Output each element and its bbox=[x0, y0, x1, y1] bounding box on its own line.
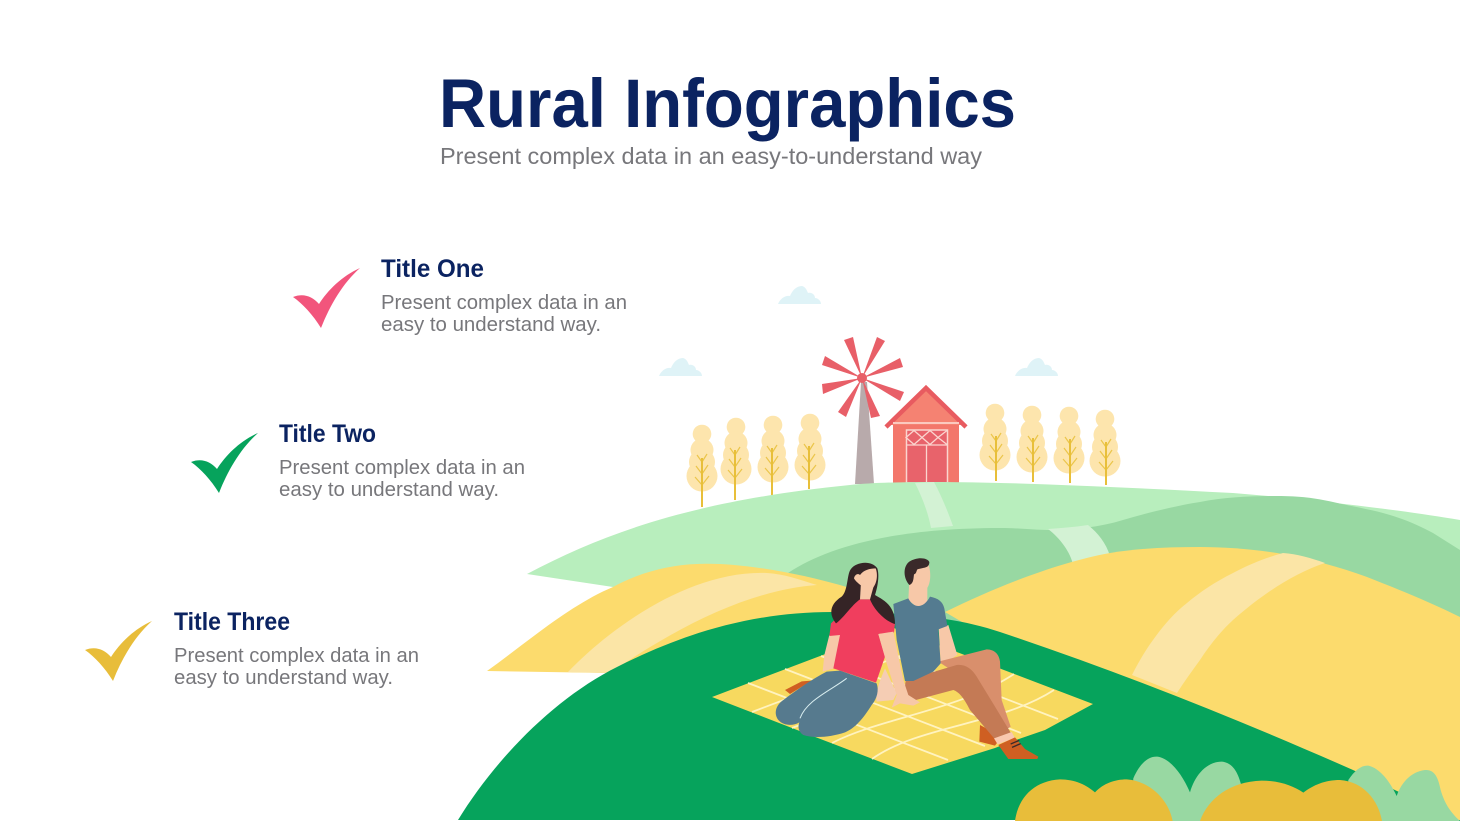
clouds bbox=[659, 286, 1058, 376]
hill: left yellow bbox=[487, 564, 860, 690]
woman hair bbox=[831, 563, 895, 624]
road on mid hill bbox=[1048, 525, 1110, 565]
hill: mid green bbox=[788, 496, 1460, 700]
man back leg bbox=[938, 649, 1011, 738]
woman inner hand bbox=[876, 668, 897, 702]
item one bbox=[293, 255, 627, 336]
icon: pink check mark bbox=[293, 268, 360, 328]
man arm bbox=[939, 625, 957, 663]
woman neck bbox=[860, 582, 874, 599]
yellow bush right bbox=[1200, 780, 1382, 821]
woman foot bbox=[785, 681, 812, 694]
woman trousers bbox=[776, 671, 878, 737]
text: description one: Present complex data in an bbox=[381, 292, 627, 314]
yellow bush left bbox=[1015, 779, 1173, 821]
icon: yellow check mark bbox=[85, 621, 152, 681]
woman shirt bbox=[829, 598, 895, 683]
heading: title two: Title Two bbox=[279, 420, 376, 448]
road on back hill bbox=[915, 482, 953, 528]
trouser seam bbox=[800, 678, 847, 718]
text: description three: easy to understand way. bbox=[174, 667, 393, 689]
people bbox=[776, 558, 1038, 759]
windmill bbox=[822, 337, 904, 484]
woman rear arm bbox=[823, 633, 841, 672]
stripe on right hill bbox=[1132, 553, 1325, 693]
man back shoe bbox=[979, 725, 1002, 746]
green bush left bbox=[1130, 757, 1243, 821]
trees bbox=[686, 404, 1120, 507]
hill: dark green foreground bbox=[458, 612, 1460, 821]
bushes bbox=[1015, 757, 1460, 821]
hill: right yellow bbox=[945, 547, 1460, 821]
heading: title three: Title Three bbox=[174, 608, 290, 636]
man front shoe bbox=[998, 737, 1038, 759]
stripe on left hill bbox=[568, 573, 817, 673]
subtitle: Present complex data in an easy-to-understand way bbox=[440, 143, 983, 169]
man hair bbox=[905, 558, 929, 585]
text: description two: Present complex data in an bbox=[279, 457, 525, 479]
text: description one: easy to understand way. bbox=[381, 314, 601, 336]
green bush right bbox=[1347, 766, 1460, 821]
woman face bbox=[854, 568, 877, 589]
picnic blanket bbox=[712, 628, 1093, 774]
man front leg bbox=[905, 665, 1011, 739]
title: Rural Infographics bbox=[439, 65, 1016, 142]
man neck bbox=[908, 580, 927, 608]
man shirt bbox=[893, 597, 947, 681]
barn bbox=[886, 388, 966, 483]
hill: light green back bbox=[527, 482, 1460, 640]
item two bbox=[191, 420, 525, 501]
icon: green check mark bbox=[191, 433, 258, 493]
man bbox=[893, 558, 1038, 759]
heading: title one: Title One bbox=[381, 255, 484, 283]
man face bbox=[907, 565, 930, 591]
item three bbox=[85, 608, 419, 689]
woman bbox=[776, 563, 920, 737]
woman front arm bbox=[878, 632, 920, 708]
man sock bbox=[994, 732, 1015, 744]
text: description two: easy to understand way. bbox=[279, 479, 499, 501]
text: description three: Present complex data in an bbox=[174, 645, 419, 667]
